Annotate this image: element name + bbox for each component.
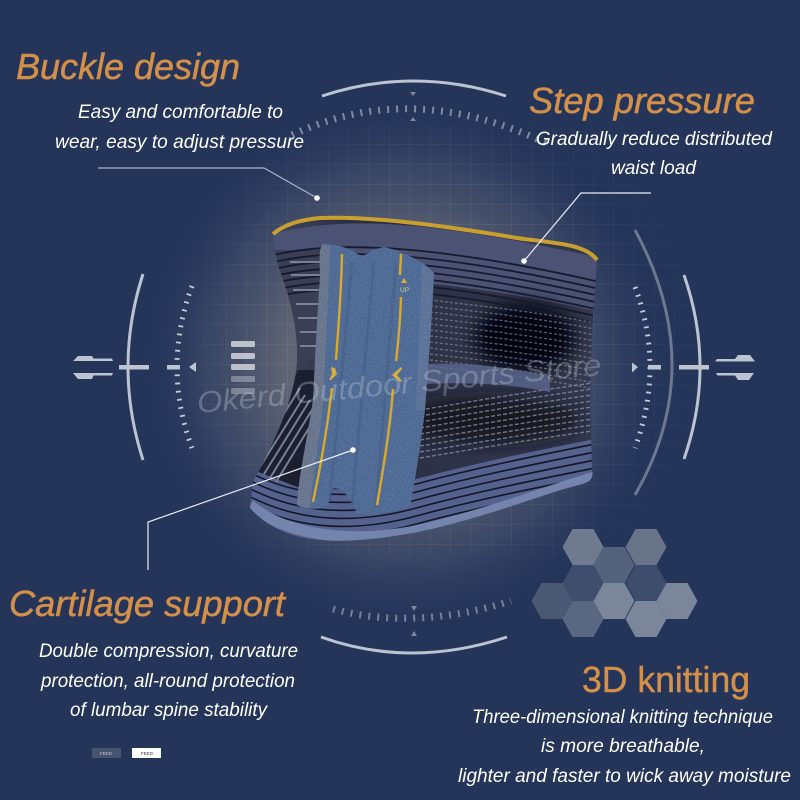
text: step pressure description [536,129,773,179]
text: cartilage description [39,641,298,721]
yellow top edge [273,218,597,260]
text: knitting description: lighter and faster to wick away moisture [458,766,791,787]
level bars [231,341,255,394]
left side stripes [260,261,320,482]
support panel [297,244,434,514]
top gauge [292,81,550,145]
text: cartilage description: protection, all-round protection [40,671,295,692]
bottom hem [250,477,595,537]
heading: 3D knitting: 3D knitting [582,659,750,700]
lower band [250,440,592,541]
small tag buttons: FEED [141,751,154,756]
text: knitting description: Three-dimensional knitting technique [472,707,773,728]
yellow stripes [313,254,401,505]
small tag buttons: FEED [100,751,113,756]
text: buckle description [55,102,304,153]
right gauge [632,230,755,495]
small tag buttons [92,748,161,758]
callout: step pressure line [521,193,651,264]
text: cartilage description: of lumbar spine stability [70,700,268,721]
waist belt [240,210,610,550]
middle stripes [430,300,600,390]
left gauge [73,274,196,460]
up marker: UP [400,287,409,294]
fabric grain [297,244,434,514]
top stripes [270,247,600,324]
icon: right bracket glyph [715,355,755,380]
text: step pressure description: Gradually reduce distributed [536,129,773,150]
central glow [100,90,720,650]
text: step pressure description: waist load [611,158,697,179]
callout: cartilage line [148,447,356,570]
side stripe band [425,364,550,392]
panel ribs [330,262,396,508]
watermark: Okerd Outdoor Sports Store [196,349,603,420]
heading: Step pressure: Step pressure [529,80,755,121]
text: buckle description: wear, easy to adjust pressure [55,132,304,153]
lower stripes [245,443,600,534]
belt body [250,220,597,541]
text: cartilage description: Double compression, curvature [39,641,298,662]
dark knit centre [475,304,575,372]
panel edge shading [297,244,330,508]
left knit [258,370,314,488]
icon: left bracket glyph [73,356,113,379]
measurement grid [195,125,695,557]
chevrons [329,367,337,380]
hexagon cluster [532,529,698,637]
up marker [400,278,409,294]
bottom gauge [321,601,511,653]
text: knitting description: is more breathable, [541,736,705,757]
heading: Buckle design: Buckle design [16,46,240,87]
text: knitting description [458,707,791,787]
heading: Cartilage support: Cartilage support [9,583,287,624]
text: buckle description: Easy and comfortable to [78,102,283,123]
callout: buckle line [98,168,320,201]
top band [270,223,600,312]
